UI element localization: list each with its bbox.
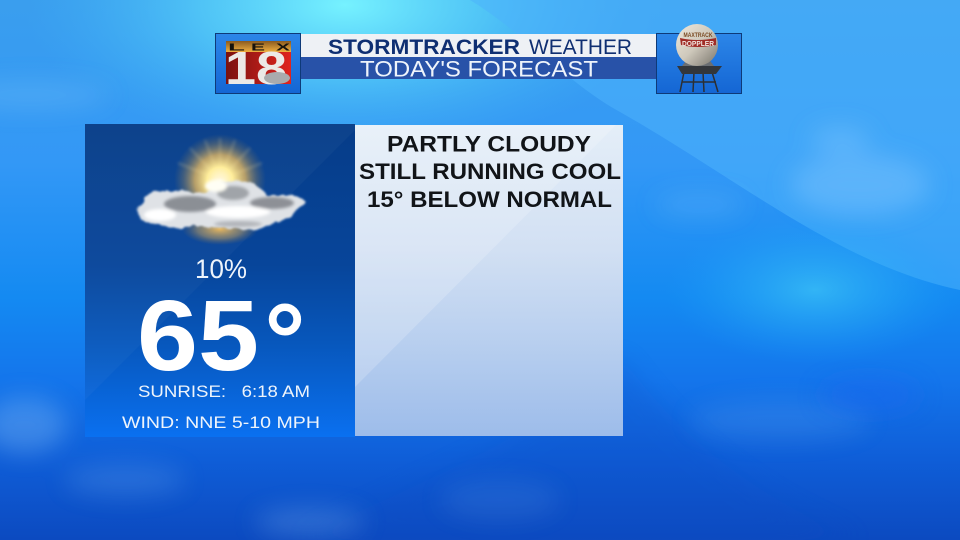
banner: title strip: WEATHER <box>529 36 632 59</box>
forecast text: PARTLY CLOUDY <box>387 132 591 156</box>
panel: current conditions <box>85 124 361 437</box>
forecast text: STILL RUNNING COOL <box>359 159 621 184</box>
icon: doppler radar tower: DOPPLER <box>682 41 714 48</box>
temperature <box>137 280 307 403</box>
icon: partly cloudy <box>137 134 306 245</box>
icon: doppler radar tower <box>656 24 742 94</box>
temperature: ° <box>263 282 307 403</box>
icon: doppler radar tower: MAXTRACK <box>684 33 713 39</box>
panel: forecast notes <box>355 125 623 436</box>
wind: WIND: NNE 5-10 MPH <box>122 413 320 432</box>
banner: title strip <box>300 34 656 82</box>
forecast text <box>359 132 621 212</box>
forecast text: 15° BELOW NORMAL <box>367 187 612 212</box>
sunrise: SUNRISE: 6:18 AM <box>138 382 310 401</box>
banner: title strip: STORMTRACKER <box>328 36 520 59</box>
logo: LEX 18: L <box>228 42 246 53</box>
precipitation chance: 10% <box>195 254 247 284</box>
logo: LEX 18: 18 <box>225 42 287 94</box>
logo: LEX 18: E <box>251 42 265 53</box>
banner: title strip: TODAY'S FORECAST <box>360 56 598 82</box>
header banner <box>216 24 742 94</box>
temperature: 65 <box>137 280 259 392</box>
logo: LEX 18 <box>216 34 300 94</box>
logo: LEX 18: X <box>276 42 292 53</box>
